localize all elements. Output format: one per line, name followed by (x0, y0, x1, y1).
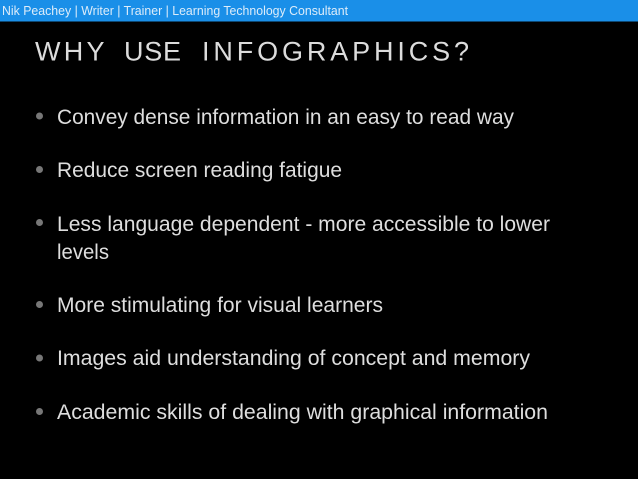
bullet 3: Less language dependent - more accessible to lower (57, 213, 550, 236)
title: INFOGRAPHICS? (202, 36, 469, 66)
bullet 1: Convey dense information in an easy to read way (57, 106, 514, 129)
bullet 2: Reduce screen reading fatigue (57, 159, 342, 182)
bullet 4: More stimulating for visual learners (57, 294, 383, 317)
bullet 5: Images aid understanding of concept and memory (57, 347, 530, 370)
bullet 3: levels (57, 241, 109, 264)
header bar (0, 0, 638, 22)
title: USE (124, 36, 181, 66)
bullet 3 (36, 213, 550, 264)
title: WHY (35, 36, 104, 66)
bullet 6: Academic skills of dealing with graphical information (57, 401, 548, 424)
bullet list (36, 106, 550, 424)
header text: Nik Peachey | Writer | Trainer | Learning Technology Consultant (2, 3, 348, 18)
